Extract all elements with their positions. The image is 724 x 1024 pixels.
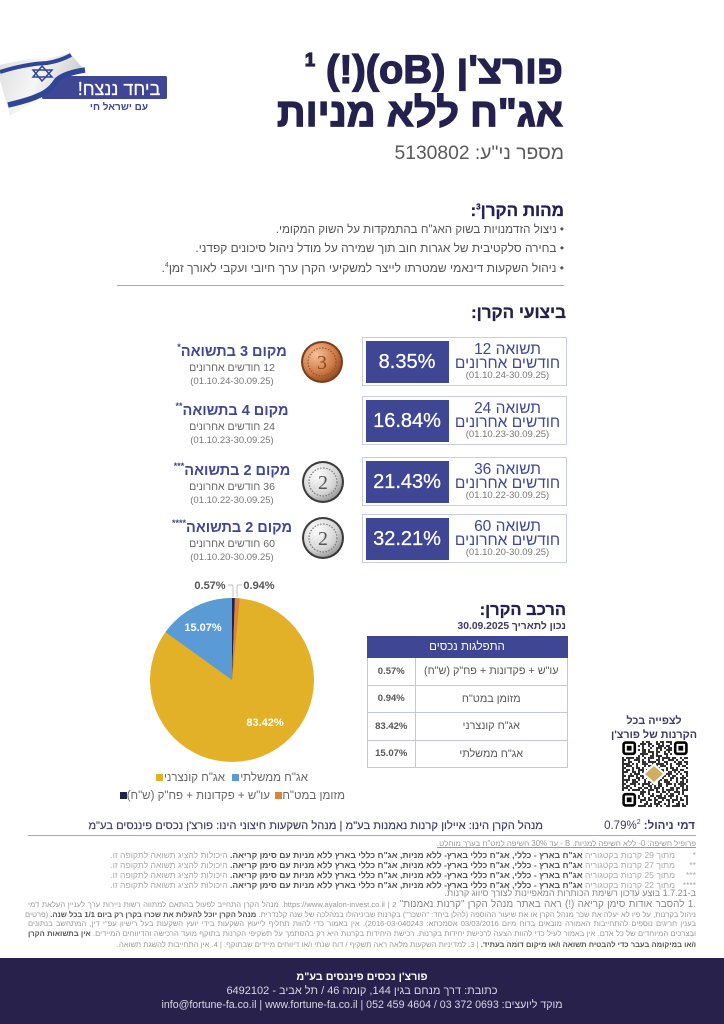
table: asset allocation: 15.07% (375, 748, 407, 759)
composition date: נכון לתאריך 30.09.2025 (458, 621, 566, 632)
footnotes: * (693, 850, 696, 860)
fund essence bullets (162, 223, 564, 275)
footnotes: ו/או במיקומה בעבר כדי להבטיח תשואה ו/או מיקום דומה בעתיד. | 3. למדיניות השקעות מלאה ראה תשקיף / דוח שנתי ו/או דיווחים מיידים שבתוקף. | 4. אין התחייבות להשגת תשואה. (117, 940, 696, 949)
return box 12 months (362, 337, 567, 386)
rank text 36 months: 36 חודשים אחרונים (189, 481, 275, 493)
footnotes: בענין חריגים נוספים להתחייבות האמורה מובאים בדוח מיום 03/03/2016 אסמכתא: 2016-03-040243). אין באמור כדי להוות תחליף לייעוץ השקעות בידי יועץ השקעות בעל רישיון עפ"י דין, המתחשב בנתונים (28, 919, 696, 928)
QR caption (611, 715, 697, 740)
return box 12 months: חודשים אחרונים (455, 355, 560, 372)
QR caption: לצפייה בכל (626, 715, 682, 727)
footnotes: .1 להסבר אודות סימן קריאה (!) ראה באתר מנהל הקרן "קרנות נאמנות" https://www.ayalon-invest.co.il | 2. מנהל הקרן התחייב לפעול בהתאם למתווה רשות ניירות ערך לעניין העלאת דמי (28, 899, 696, 910)
pie chart: 0.57% (194, 580, 226, 592)
table: asset allocation (367, 636, 568, 768)
return box 60 months: 32.21% (373, 528, 441, 550)
rank text 36 months (174, 461, 290, 506)
table: asset allocation: 0.94% (378, 693, 405, 704)
rank text 36 months: (01.10.22-30.09.25) (190, 495, 274, 506)
table: asset allocation: 83.42% (375, 721, 407, 732)
return box 24 months: תשואה 24 (474, 400, 541, 417)
icon: bronze coin 3: 3 (317, 352, 327, 374)
logo: Israeli flag with slogan: עם ישראל חי (90, 102, 148, 113)
return box 24 months: (01.10.23-30.09.25) (466, 429, 549, 440)
table: asset allocation: התפלגות נכסים (429, 641, 505, 653)
rank text 36 months: מקום 2 בתשואה*** (174, 461, 290, 479)
icon: bronze coin 3 (301, 341, 343, 383)
rank text 60 months: מקום 2 בתשואה**** (172, 518, 292, 536)
icon: silver coin 2 (36 months): 2 (318, 472, 328, 494)
rank text 60 months: 60 חודשים אחרונים (189, 538, 275, 550)
title (277, 48, 564, 135)
management fee: דמי ניהול: 0.79%2 (604, 819, 695, 832)
pie chart: 83.42% (246, 717, 284, 729)
rank text 60 months (172, 518, 292, 563)
pie legend: אג"ח ממשלתי (240, 772, 308, 784)
return box 36 months: חודשים אחרונים (455, 475, 560, 492)
footnotes: ב-1.7.21 בוצע עדכון רשימת הכותרות המאפיינות לצורך סיווג קרנות. (445, 888, 696, 898)
rank text 60 months: (01.10.20-30.09.25) (190, 552, 274, 563)
pie chart: 15.07% (184, 622, 222, 634)
rank text 12 months: מקום 3 בתשואה* (177, 342, 287, 360)
rank text 12 months: (01.10.24-30.09.25) (190, 376, 274, 387)
return box 36 months: תשואה 36 (474, 461, 541, 478)
icon: silver coin 2 (60 months) (302, 517, 344, 559)
return box 60 months (362, 514, 567, 563)
rank text 24 months (176, 401, 288, 446)
pie chart: 0.94% (243, 580, 275, 592)
footer bar: פורצ'ן נכסים פיננסים בע"מ (296, 971, 428, 983)
fund essence bullets: • בחירה סלקטיבית של אגרות חוב תוך שמירה על מודל ניהול סיכונים קפדני. (195, 241, 564, 255)
table: asset allocation: מזומן במט"ח (462, 693, 521, 705)
footnotes: מתוך 22 קרנות בקטגוריה אג"ח בארץ - כללי, אג"ח כללי בארץ- ללא מניות, אג"ח כללי בארץ ללא מניות עם סימן קריאה. היכולות להציג תשואה לתקופה זו. (110, 880, 675, 890)
rank text 24 months: 24 חודשים אחרונים (189, 421, 275, 433)
fund essence bullets: • ניהול השקעות דינאמי שמטרתו לייצר למשקיעי הקרן ערך חיובי ועקבי לאורך זמן4. (162, 261, 564, 275)
return box 60 months: תשואה 60 (474, 518, 541, 535)
return box 60 months: חודשים אחרונים (455, 532, 560, 549)
table: asset allocation: עו"ש + פקדונות + פח"ק (ש"ח) (424, 665, 559, 677)
footer bar: מוקד ליועצים: info@fortune-fa.co.il | www.fortune-fa.co.il | 052 459 4604 / 03 372 0693 (162, 999, 562, 1011)
pie legend: אג"ח קונצרני (164, 772, 225, 784)
fund essence bullets: • ניצול הזדמנויות בשוק האג"ח בהתמקדות על השוק המקומי. (276, 223, 564, 236)
return box 60 months: (01.10.20-30.09.25) (466, 547, 549, 558)
footer bar (0, 958, 724, 1024)
return box 12 months: (01.10.24-30.09.25) (466, 370, 549, 381)
icon: silver coin 2 (36 months) (302, 461, 344, 503)
return box 24 months: 16.84% (373, 410, 441, 432)
icon: QR code (622, 741, 688, 807)
table: asset allocation: 0.57% (378, 666, 405, 677)
footnotes: מתוך 29 קרנות בקטגוריה אג"ח בארץ - כללי, אג"ח כללי בארץ- ללא מניות, אג"ח כללי בארץ ללא מניות עם סימן קריאה. היכולות להציג תשואה לתקופה זו. (110, 850, 675, 860)
return box 12 months: תשואה 12 (474, 341, 541, 358)
icon: silver coin 2 (60 months): 2 (318, 528, 328, 550)
rank text 24 months: מקום 4 בתשואה** (176, 401, 288, 419)
return box 24 months: חודשים אחרונים (455, 414, 560, 431)
logo: Israeli flag with slogan (0, 53, 167, 116)
table: asset allocation: אג"ח ממשלתי (459, 748, 523, 760)
pie legend: מזומן במט"ח (282, 790, 345, 802)
footnotes: **** (683, 880, 696, 890)
security number: מספר ני"ע: 5130802 (394, 143, 564, 164)
pie legend: עו"ש + פקדונות + פח"ק (ש"ח) (127, 790, 270, 802)
footnotes (25, 839, 696, 949)
footnotes: ** (689, 860, 696, 870)
heading: fund essence: מהות הקרן3: (470, 201, 564, 220)
rank text 24 months: (01.10.23-30.09.25) (190, 435, 274, 446)
return box 12 months: 8.35% (379, 350, 435, 372)
footnotes: מתוך 27 קרנות בקטגוריה אג"ח בארץ - כללי, אג"ח כללי בארץ- ללא מניות, אג"ח כללי בארץ ללא מניות עם סימן קריאה. היכולות להציג תשואה לתקופה זו. (110, 860, 675, 870)
title: אג"ח ללא מניות (277, 91, 563, 135)
heading: fund composition: הרכב הקרן: (480, 601, 566, 619)
return box 36 months (362, 457, 567, 506)
title: פורצ'ן (oB)(!) 1 (305, 48, 563, 92)
rank text 12 months (177, 342, 287, 387)
footnotes: מתוך 25 קרנות בקטגוריה אג"ח בארץ - כללי, אג"ח כללי בארץ- ללא מניות, אג"ח כללי בארץ ללא מניות עם סימן קריאה. היכולות להציג תשואה לתקופה זו. (110, 870, 675, 880)
heading: fund performance: ביצועי הקרן: (471, 303, 566, 322)
rank text 12 months: 12 חודשים אחרונים (189, 362, 275, 374)
QR caption: הקרנות של פורצ'ן (611, 728, 697, 740)
footnotes: ובצרכים המיוחדים של כל אדם. אין באמור לעיל כדי להוות הצעה לרכישת יחידות בקרנות. רכישת היחידות בקרנות היא רק בהסתמך על תשקיפי הקרנות בתוקף מועד הרכישה והדיווחים המיידים. אין בתשואות הקרן (28, 929, 696, 938)
footer bar: כתובת: דרך מנחם בגין 144, קומה 46 / תל אביב - 6492102 (226, 985, 498, 997)
footnotes: ניהול בקרנות, על פיו לא יעלה את שכר מנהל הקרן או את שיעור ההוספה (להלן ביחד: "השכר") בקרנות שביניהולו במהלכה של שנה קלנדרית. מנהל הקרן יוכל להעלות את שכרו בקרן רק ביום 1/1 בכל שנה. (פרטים (25, 910, 696, 919)
footnotes: פרופיל חשיפה: 0- ללא חשיפה למניות. B - עד 30% חשיפה למט"ח בערך מוחלט. (437, 839, 696, 848)
footnotes: *** (686, 870, 696, 880)
pie legend (120, 772, 345, 802)
return box 24 months (362, 396, 567, 445)
pie chart (150, 580, 314, 762)
table: asset allocation: אג"ח קונצרני (463, 720, 520, 732)
logo: Israeli flag with slogan: ביחד ננצח! (78, 79, 160, 99)
return box 36 months: 21.43% (373, 470, 441, 492)
fund manager line: מנהל הקרן הינו: איילון קרנות נאמנות בע"מ | מנהל השקעות חיצוני הינו: פורצ'ן נכסים פיננסים בע"מ (88, 820, 543, 832)
return box 36 months: (01.10.22-30.09.25) (466, 490, 549, 501)
